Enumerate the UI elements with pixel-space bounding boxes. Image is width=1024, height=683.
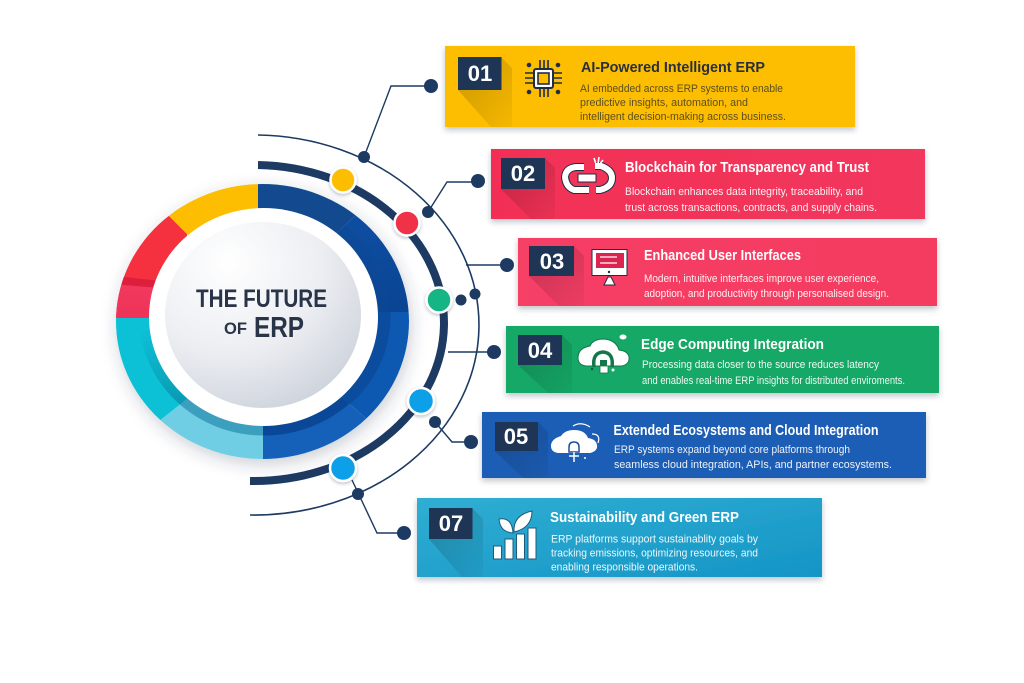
text 04: and enables real-time ERP insights for distributed enviroments. bbox=[642, 375, 905, 387]
text 04: Processing data closer to the source reduces latency bbox=[642, 359, 879, 371]
badge 04: 04 bbox=[528, 338, 553, 363]
text 02: Blockchain enhances data integrity, traceability, and bbox=[625, 186, 863, 198]
text 05: ERP systems expand beyond core platforms through bbox=[614, 444, 850, 456]
text 04 bbox=[642, 359, 905, 387]
text 01: AI embedded across ERP systems to enable bbox=[580, 83, 783, 95]
text 07: enabling responsible operations. bbox=[551, 562, 698, 574]
grey centre disc bbox=[165, 222, 361, 408]
text 03 bbox=[644, 273, 889, 300]
badge 01 bbox=[458, 57, 502, 90]
connector 03 bbox=[456, 258, 514, 306]
icon: monitor bbox=[592, 250, 627, 285]
arc node green bbox=[426, 288, 452, 312]
icon: blockchain links bbox=[565, 157, 612, 190]
badge 05 bbox=[495, 422, 538, 451]
card 02 bbox=[491, 149, 925, 219]
heading 03: Enhanced User Interfaces bbox=[644, 247, 801, 264]
text 07 bbox=[551, 534, 758, 574]
heading 01: AI-Powered Intelligent ERP bbox=[581, 59, 765, 76]
badge 03: 03 bbox=[540, 249, 564, 274]
central ring chart bbox=[110, 180, 420, 472]
badge 05: 05 bbox=[504, 424, 528, 449]
arc node red bbox=[394, 210, 420, 236]
text 02: trust across transactions, contracts, and supply chains. bbox=[625, 202, 877, 214]
icon: leaves and bars bbox=[494, 511, 536, 559]
text 01: predictive insights, automation, and bbox=[580, 97, 748, 109]
card 07 bbox=[417, 498, 822, 577]
heading 04: Edge Computing Integration bbox=[641, 336, 824, 353]
centre title: ERP bbox=[254, 312, 304, 344]
heading 05: Extended Ecosystems and Cloud Integration bbox=[614, 422, 878, 439]
text 03: adoption, and productivity through personalised design. bbox=[644, 288, 889, 300]
outer thin arc bbox=[250, 135, 479, 515]
infographic canvas bbox=[110, 46, 942, 584]
white inner disc bbox=[149, 208, 378, 426]
badge 02 bbox=[501, 158, 545, 189]
text 07: ERP platforms support sustainablity goals by bbox=[551, 534, 758, 546]
card 01 bbox=[445, 46, 855, 127]
ring segments bbox=[116, 184, 409, 459]
icon: cloud integration bbox=[551, 424, 599, 462]
badge 01: 01 bbox=[468, 61, 492, 86]
centre title: THE FUTURE bbox=[196, 285, 327, 313]
text 03: Modern, intuitive interfaces improve user experience, bbox=[644, 273, 879, 285]
centre title bbox=[196, 285, 327, 344]
card 04 bbox=[506, 326, 939, 393]
text 05: seamless cloud integration, APIs, and partner ecosystems. bbox=[614, 459, 892, 471]
connector 04 bbox=[448, 345, 501, 359]
card 05 bbox=[482, 412, 926, 478]
text 01: intelligent decision-making across business. bbox=[580, 111, 786, 123]
badge 07 bbox=[429, 508, 472, 539]
icon: chip bbox=[525, 60, 562, 97]
connector 07 bbox=[352, 480, 411, 540]
badge 03 bbox=[529, 246, 574, 276]
badge 02: 02 bbox=[511, 161, 535, 186]
arc node light blue bbox=[330, 455, 356, 481]
thick segmented arc bbox=[250, 165, 444, 481]
heading 02: Blockchain for Transparency and Trust bbox=[625, 159, 869, 176]
text 01 bbox=[580, 83, 786, 123]
centre title: OF bbox=[224, 319, 247, 338]
text 05 bbox=[614, 444, 892, 471]
arc node yellow bbox=[330, 168, 356, 192]
card 03 bbox=[518, 238, 937, 306]
connector 02 bbox=[422, 174, 485, 218]
arc node blue bbox=[408, 388, 434, 414]
icon: edge cloud bbox=[578, 334, 629, 373]
connector 05 bbox=[429, 416, 478, 449]
badge 04 bbox=[518, 335, 562, 365]
connector 01 bbox=[358, 79, 438, 163]
heading 07: Sustainability and Green ERP bbox=[550, 509, 739, 526]
badge 07: 07 bbox=[439, 511, 463, 536]
text 02 bbox=[625, 186, 877, 214]
ring inner shade bands bbox=[144, 226, 390, 436]
text 07: tracking emissions, optimizing resources, and bbox=[551, 548, 758, 560]
